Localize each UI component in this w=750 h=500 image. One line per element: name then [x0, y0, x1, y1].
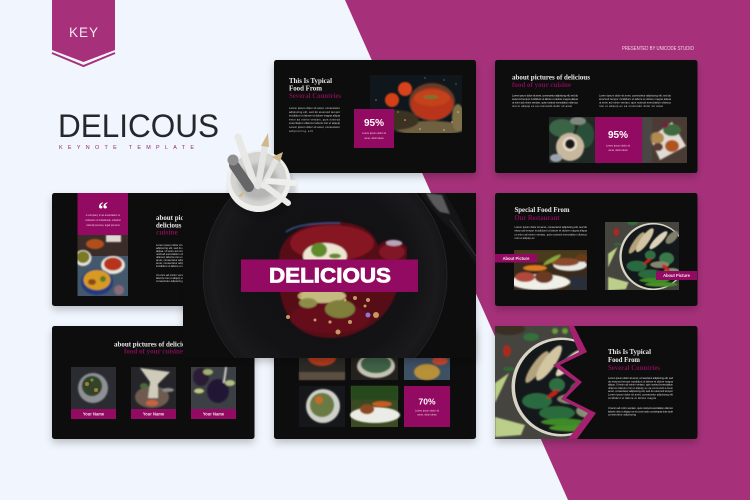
- body text: [156, 243, 204, 283]
- body text: adipiscing elit, sed do eiusmod tempor: [289, 110, 340, 114]
- presented by credit: PRESENTED BY UNICODE STUDIO: [622, 46, 694, 52]
- body text: Ut enim ad minim veniam, quis nostrud: [156, 273, 203, 277]
- slide: special food: [492, 193, 700, 312]
- body text: exercitation ullamco laboris nisi ut aliquip: [289, 121, 340, 125]
- body text: amet, consectetur adipiscing elit sed: [156, 261, 200, 265]
- pencil cup: [226, 133, 296, 218]
- stat card: 95%: amet, dolor ideas: [364, 137, 384, 140]
- body text, right column: eiusmod tempor incididunt ut labore et dolore magna aliqua: [599, 97, 672, 101]
- magenta diagonal panel: [345, 0, 750, 500]
- slide heading: [514, 205, 570, 222]
- stat card: 70%: amet, dolor ideas: [417, 414, 437, 416]
- body text: laboris nisi ut aliquip ex ea commodo: [156, 276, 201, 280]
- slide heading: food of your cuisine: [512, 80, 572, 89]
- slide heading: Food From: [608, 355, 641, 364]
- slide heading: [156, 213, 206, 236]
- pencils and pens: [228, 133, 294, 203]
- body text: [514, 225, 588, 240]
- KEY ribbon badge: [52, 0, 115, 66]
- body text: ut enim ad minim veniam, quis nostrud exercitation ullamco: [514, 232, 588, 236]
- body text, left column: Lorem ipsum dolor sit amet, consectetur adipiscing elit, sed do: [512, 94, 578, 98]
- body text: eiusmod tempor incididunt ut labore et dolore magna aliqua: [514, 229, 588, 233]
- body text: Ut enim ad minim veniam, quis nostrud exercitation ullamco: [608, 406, 674, 410]
- quote card: “: [98, 199, 108, 221]
- photo grid tile: meat plate: [350, 386, 400, 427]
- photo: burger plate: [642, 117, 687, 163]
- slide heading: Several Countries: [608, 363, 660, 372]
- slide: salad with zigzag frame: [491, 326, 700, 447]
- slide heading: delicious food: [156, 220, 197, 230]
- photo card: blueberry drinks: Your Name: [203, 412, 225, 416]
- photo: meat plate: [510, 250, 588, 290]
- body text: [289, 106, 340, 133]
- subtitle: KEYNOTE TEMPLATE: [59, 145, 194, 151]
- KEY ribbon badge: KEY: [69, 25, 98, 40]
- photo: salad bowl: [495, 326, 588, 439]
- body text, right column: Lorem ipsum dolor sit amet, consectetur adipiscing elit, sed do: [599, 94, 672, 98]
- body text, right column: [599, 94, 672, 108]
- slide: quote with bowls (partly behind hero): [48, 193, 183, 314]
- quote card: [78, 193, 128, 235]
- body text: enim ad minim veniam, quis nostrud: [289, 117, 340, 121]
- photo grid tile: salad: [351, 345, 398, 380]
- slide heading: [114, 340, 192, 356]
- slide: typical food with sauce photo: [274, 60, 476, 173]
- body text: Lorem ipsum dolor sit amet, consectetur adipiscing elit: [608, 392, 673, 396]
- photo card: noodles: [131, 367, 176, 419]
- photo: curry bowls: [74, 235, 128, 296]
- slide heading: [289, 76, 341, 100]
- slide heading: cuisine: [156, 228, 179, 236]
- slide heading: about pictures of delicious: [512, 72, 590, 82]
- body text: [608, 376, 674, 417]
- body text: nisi ut aliquip ex: [514, 236, 535, 240]
- body text: consectetur adipiscing: [608, 413, 636, 417]
- slide: photo grid with 70% stat (partly behind hero): [274, 326, 476, 439]
- tag: About Picture: [656, 271, 697, 280]
- slide heading: This Is Typical: [608, 347, 651, 356]
- body text: ullamco laboris nisi ut aliquip ex ea: [156, 255, 198, 259]
- photo card: shellfish: [71, 367, 116, 419]
- body text: Lorem ipsum dolor sit amet, consectetur: [289, 125, 340, 129]
- slide heading: Food From: [289, 84, 323, 92]
- tag: About Picture: About Picture: [503, 256, 530, 261]
- quote card: natural persons, legal persons: [86, 224, 120, 227]
- stat card: 95%: amet, dolor ideas: [608, 149, 628, 152]
- title banner: DELICIOUS: [269, 264, 391, 288]
- body text: aliqua. Ut enim ad minim veniam quis: [156, 249, 201, 253]
- slide heading: Our Restaurant: [514, 213, 560, 222]
- body text: ullamco laboris nisi ut aliquip ex ea commodo Lorem: [608, 386, 674, 390]
- body text, right column: ut enim ad minim veniam, quis nostrud exercitation ullamco: [599, 101, 672, 105]
- body text: Lorem ipsum dolor sit amet, consectetur: [156, 243, 204, 247]
- body text, left column: ut enim ad minim veniam, quis nostrud exercitation ullamco: [512, 101, 578, 105]
- body text: Lorem ipsum dolor sit amet, consectetur: [289, 106, 340, 110]
- body text: Lorem ipsum dolor sit amet, consectetur adipiscing elit, sed: [608, 376, 674, 380]
- body text: aliqua. Ut enim ad minim veniam, quis nostrud exercitation: [608, 383, 674, 387]
- stat card: 95%: Lorem ipsum dolor sit: [362, 132, 386, 135]
- title: DELICOUS: [58, 108, 219, 144]
- stat card: 95%: Lorem ipsum dolor sit: [606, 144, 630, 148]
- berry sauce and garnish: [278, 222, 407, 338]
- stat card: 70%: 70%: [418, 396, 436, 406]
- stat card: 70%: [404, 386, 450, 427]
- slide heading: food of your cuisine: [124, 346, 184, 356]
- slide heading: Special Food From: [514, 205, 570, 214]
- quote card: collection of individuals, whether: [85, 219, 121, 222]
- body text: amet, consectetur adipiscing elit sed: [156, 258, 200, 262]
- tag: About Picture: About Picture: [663, 273, 691, 278]
- slide heading: Several Countries: [289, 91, 341, 100]
- black plate: [202, 193, 448, 358]
- title banner: [241, 260, 418, 292]
- body text, right column: nisi ut aliquip ex ea commodo dolor sit amet: [599, 104, 663, 108]
- stat card: 95%: 95%: [364, 118, 384, 129]
- slide: about pictures with three portraits (partly behind hero): [52, 326, 254, 439]
- body text: incididunt ut labore et dolore magna aliqua: [289, 114, 340, 118]
- photo card: blueberry drinks: [191, 367, 236, 419]
- body text: do eiusmod tempor incididunt ut labore et dolore magna: [608, 379, 674, 383]
- photo grid tile: bowls: [404, 345, 450, 380]
- photo grid tile: ramen bowl: [299, 386, 345, 427]
- stat card: 95%: [354, 109, 394, 148]
- stat card: 95%: 95%: [608, 130, 628, 141]
- slide heading: This Is Typical: [289, 76, 332, 85]
- stat card: 95%: [595, 117, 642, 163]
- photo card: shellfish: Your Name: [83, 412, 105, 416]
- stat card: 70%: Lorem ipsum dolor sit: [415, 410, 439, 412]
- tag: About Picture: [495, 254, 537, 262]
- slide heading: about pictures of: [156, 213, 206, 222]
- quote card: A company is an association or: [86, 214, 120, 217]
- photo card: noodles: Your Name: [143, 412, 165, 416]
- body text: nostrud exercitation ullamco laboris: [156, 252, 199, 256]
- body text: incididunt ut labore et dolore magna: [608, 396, 656, 400]
- body text, left column: [512, 94, 578, 108]
- spoon: [420, 193, 476, 264]
- body text: adipiscing elit: [289, 129, 313, 133]
- body text, left column: nisi ut aliquip ex ea commodo dolor sit amet: [512, 104, 572, 108]
- photo: tomato sauce bowl: [370, 75, 466, 135]
- body text: amet, consectetur adipiscing elit, sed do eiusmod tempor: [608, 389, 673, 393]
- zigzag magenta frame: [553, 326, 596, 439]
- photo: herb plate: [549, 117, 595, 163]
- body text: laboris nisi ut aliquip ex ea commodo consequat duis aute: [608, 409, 674, 413]
- slide heading: about pictures of delicious: [114, 340, 192, 348]
- slide: about pictures with stat: [495, 60, 698, 173]
- photo: salad bowl: [605, 222, 679, 290]
- body text: adipiscing elit, sed do eiusmod tempor: [156, 246, 202, 250]
- body text: incididunt ut labore et dolore magna: [156, 264, 199, 268]
- slide heading: [608, 347, 660, 372]
- photo grid tile: sauce: [299, 345, 345, 380]
- hero slide: DELICIOUS plate: [179, 193, 480, 366]
- body text: consectetur adipiscing elit sed do: [156, 279, 196, 283]
- body text: Lorem ipsum dolor sit amet, consectetur adipiscing elit, sed do: [514, 225, 588, 229]
- slide heading: [512, 72, 590, 89]
- body text, left column: eiusmod tempor incididunt ut labore et dolore magna aliqua: [512, 97, 578, 101]
